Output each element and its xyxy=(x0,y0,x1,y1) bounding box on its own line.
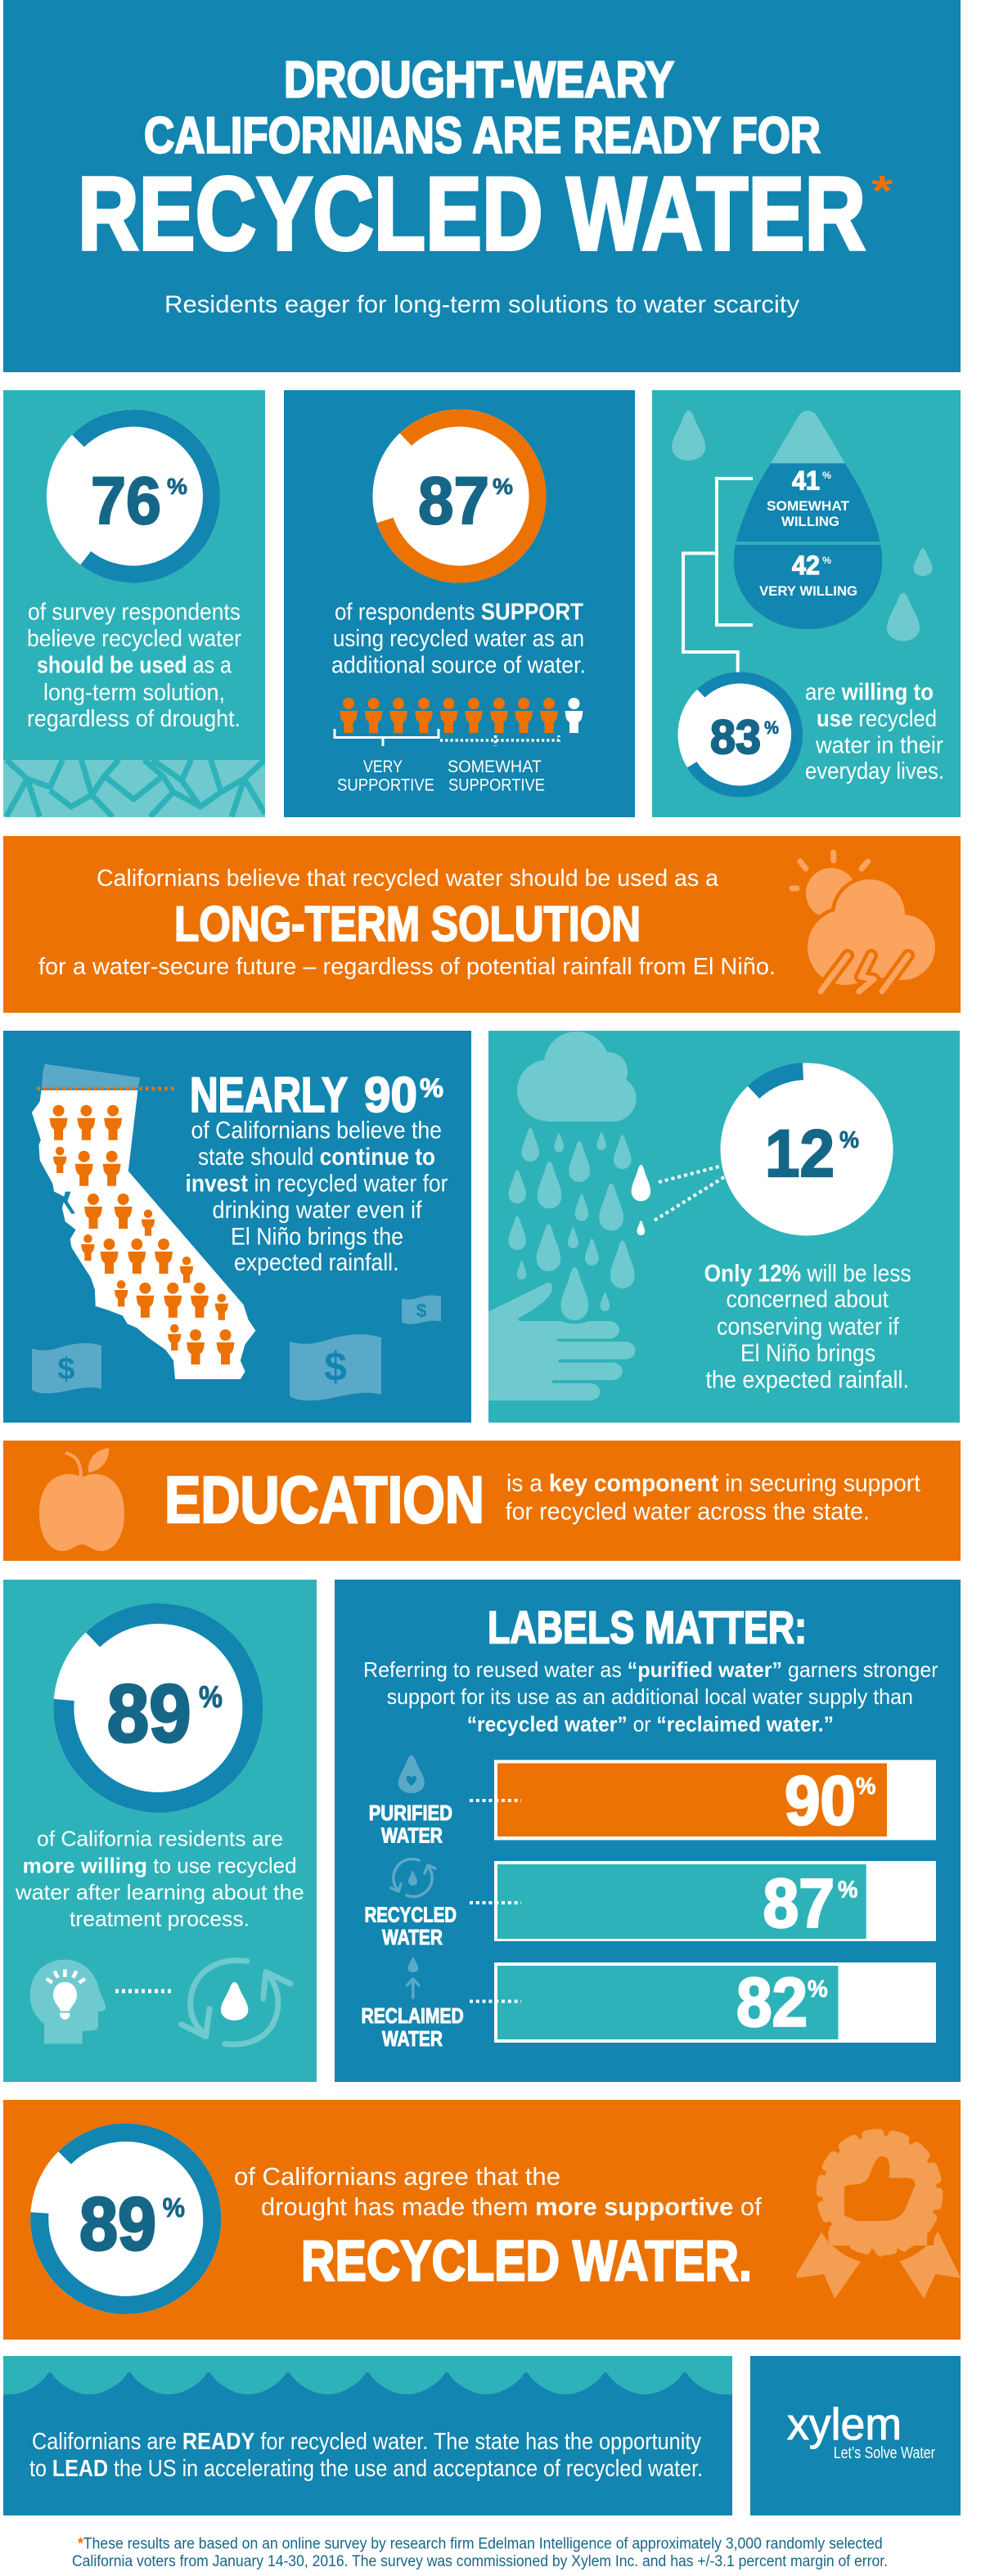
text: only 12 percent: El Niño brings xyxy=(740,1340,875,1367)
text: continue to invest: El Niño brings the xyxy=(231,1224,403,1251)
subtitle: Residents eager for long-term solutions to water scarcity xyxy=(164,291,799,318)
icon: dollar bills: $ xyxy=(324,1344,347,1390)
label: 42 percent very willing: % xyxy=(822,555,831,566)
text: purified water garners support: Referring to reused water as “purified water” garners stronger xyxy=(363,1657,938,1682)
icon: small drops xyxy=(672,411,933,641)
pattern: cracked earth xyxy=(3,760,265,817)
map: california xyxy=(32,1064,255,1379)
text: more willing xyxy=(15,1827,304,1931)
connector: dots xyxy=(115,1989,174,1993)
connector: bracket lines xyxy=(683,479,753,672)
icon: dollar bills xyxy=(32,1296,441,1400)
icon: recycle water xyxy=(182,1960,290,2044)
labels: supportive categories: SOMEWHAT xyxy=(448,758,542,776)
text: ready and lead xyxy=(29,2429,703,2482)
heading: nearly 90 percent: 90 xyxy=(364,1068,417,1122)
panel: 12 percent xyxy=(488,1031,960,1423)
panel: title banner xyxy=(3,0,961,372)
donut: 76 percent: % xyxy=(167,474,187,499)
donut: 87 percent: 87 xyxy=(418,464,489,538)
label: purified water xyxy=(369,1801,452,1848)
text: respondents support: using recycled water as an xyxy=(333,626,584,652)
text: survey respondents: regardless of drought. xyxy=(27,706,241,732)
label: 41 percent somewhat willing: 41 xyxy=(792,466,820,496)
text: drought more supportive xyxy=(234,2162,762,2221)
text: key component xyxy=(506,1470,921,1526)
bar: purified water 90 percent: 90 xyxy=(785,1762,856,1839)
bracket: somewhat supportive xyxy=(440,735,559,746)
label: recycled water: RECYCLED xyxy=(365,1902,457,1926)
panel: xylem logo: Let’s Solve Water xyxy=(834,2444,935,2462)
donut: 89 percent supportive xyxy=(30,2124,221,2314)
text: continue to invest: invest in recycled water for xyxy=(185,1171,448,1198)
bracket: very supportive xyxy=(335,729,439,746)
text: only 12 percent: concerned about xyxy=(727,1286,889,1313)
labels: supportive categories: VERY xyxy=(363,758,403,776)
donut: 76 percent xyxy=(47,409,220,582)
label: reclaimed water: RECLAIMED xyxy=(362,2003,464,2028)
text: survey respondents: of survey respondents xyxy=(28,599,241,625)
donut: 76 percent: 76 xyxy=(91,464,161,538)
donut: 83 percent xyxy=(677,672,802,797)
bar: reclaimed water 82 percent: % xyxy=(808,1976,828,2003)
text: continue to invest xyxy=(185,1117,448,1276)
donut: 89 percent supportive: 89 xyxy=(79,2183,156,2266)
icon: cloud, rain and hand xyxy=(488,1032,637,1400)
heading: drought-weary: DROUGHT-WEARY xyxy=(284,52,674,108)
pictogram: ten people xyxy=(340,698,583,733)
panel: long-term solution banner xyxy=(3,836,961,1013)
panel: nearly 90 percent xyxy=(3,1031,471,1423)
label: 41 percent somewhat willing: % xyxy=(822,470,831,481)
label: 42 percent very willing xyxy=(759,551,857,599)
text: more willing: of California residents are xyxy=(37,1827,283,1851)
label: recycled water: WATER xyxy=(382,1925,443,1949)
panel: call to action xyxy=(3,2356,732,2515)
text: key component: is a key component in securing support xyxy=(506,1470,921,1497)
label: 41 percent somewhat willing xyxy=(767,466,850,529)
heading: labels matter: LABELS MATTER: xyxy=(488,1602,807,1653)
bar: recycled water 87 percent xyxy=(494,1861,936,1942)
text: continue to invest: state should continue to xyxy=(198,1144,435,1171)
donut: 83 percent: 83 xyxy=(710,711,761,764)
icon: dollar bills: $ xyxy=(57,1352,75,1387)
asterisk: * xyxy=(871,168,893,215)
text: respondents support: additional source of water. xyxy=(331,653,586,679)
text: survey respondents xyxy=(27,599,241,732)
wave xyxy=(3,2372,732,2515)
label: 42 percent very willing: VERY WILLING xyxy=(759,583,857,599)
panel: 87 percent xyxy=(284,390,635,817)
text: survey respondents: believe recycled water xyxy=(27,626,241,652)
heading: californians are ready for: CALIFORNIANS ARE READY FOR xyxy=(144,108,821,164)
icon: dollar bills: $ xyxy=(416,1300,427,1321)
icon: recycle drop xyxy=(391,1859,435,1896)
text: more willing: treatment process. xyxy=(70,1907,250,1931)
text: more willing: more willing to use recycled xyxy=(23,1853,297,1877)
label: purified water: PURIFIED xyxy=(369,1801,452,1825)
text: survey respondents: should be used as a xyxy=(37,653,232,679)
text: ready and lead: to LEAD the US in accelerating the use and acceptance of recycled water. xyxy=(29,2456,703,2482)
icon: head with lightbulb xyxy=(30,1960,106,2043)
label: purified water: WATER xyxy=(381,1823,443,1848)
label: recycled water xyxy=(365,1902,457,1949)
panel: xylem logo xyxy=(750,2356,961,2515)
dotted line: 90 percent level xyxy=(37,1086,177,1090)
donut: 87 percent: % xyxy=(493,474,513,499)
text: water-secure future: for a water-secure future – regardless of potential rainfall from El Niño. xyxy=(38,954,776,980)
panel: xylem logo: xylem xyxy=(787,2398,902,2449)
label: reclaimed water xyxy=(362,2003,464,2051)
panel: more supportive banner xyxy=(3,2100,961,2340)
donut: 89 percent: % xyxy=(199,1680,223,1714)
footnote: California voters from January 14-30, 2016. The survey was commissioned by Xylem Inc. and has +/-3.1 percent margin of error. xyxy=(72,2553,888,2570)
panel: education banner xyxy=(3,1441,961,1561)
heading: recycled water: RECYCLED WATER. xyxy=(301,2229,752,2293)
heading: nearly 90 percent: % xyxy=(420,1073,443,1103)
text: ready and lead: Californians are READY for recycled water. The state has the opportunity xyxy=(32,2429,701,2455)
text: respondents support xyxy=(331,599,586,679)
donut: 89 percent: 89 xyxy=(107,1668,191,1760)
footnote: *These results are based on an online survey by research firm Edelman Intelligence of approximately 3,000 randomly selected xyxy=(78,2536,883,2553)
label: 41 percent somewhat willing: WILLING xyxy=(781,514,839,529)
bar: recycled water 87 percent: % xyxy=(838,1877,858,1904)
text: willing to use xyxy=(805,680,944,784)
heading: long-term solution: LONG-TERM SOLUTION xyxy=(174,897,641,951)
icon: sun cloud and rain xyxy=(792,852,935,991)
icon: drop and up arrow xyxy=(407,1958,419,1998)
donut: 12 percent xyxy=(720,1063,893,1235)
labels: supportive categories xyxy=(337,758,545,795)
bar: recycled water 87 percent: 87 xyxy=(763,1865,835,1942)
bar: purified water 90 percent: % xyxy=(856,1774,876,1800)
panel: 83 percent willing xyxy=(652,390,961,817)
donut: 12 percent: 12 xyxy=(765,1117,835,1191)
text: only 12 percent xyxy=(704,1261,911,1394)
donut: 89 percent supportive: % xyxy=(163,2192,185,2223)
text: continue to invest: expected rainfall. xyxy=(234,1249,399,1276)
text: survey respondents: long-term solution, xyxy=(43,680,225,706)
bar: reclaimed water 82 percent: 82 xyxy=(736,1964,808,2041)
text: drought more supportive: of Californians agree that the xyxy=(234,2162,560,2191)
pictogram: people on map xyxy=(50,1105,234,1364)
donut: 87 percent xyxy=(373,409,547,582)
labels: supportive categories: SUPPORTIVE xyxy=(448,775,545,795)
labels: supportive categories: SUPPORTIVE xyxy=(337,775,434,795)
icon: drop with heart xyxy=(398,1756,425,1793)
panel: 76 percent xyxy=(3,390,265,817)
chart: water drop split xyxy=(733,411,882,630)
icon: apple xyxy=(39,1448,124,1551)
text: more willing: water after learning about the xyxy=(15,1880,304,1904)
label: 42 percent very willing: 42 xyxy=(792,551,820,580)
text: only 12 percent: the expected rainfall. xyxy=(705,1367,909,1394)
connectors: dotted lines xyxy=(470,1801,521,2001)
heading: nearly 90 percent: NEARLY xyxy=(190,1068,348,1122)
label: reclaimed water: WATER xyxy=(382,2026,443,2051)
text: purified water garners support: “recycled water” or “reclaimed water.” xyxy=(467,1712,834,1737)
text: only 12 percent: conserving water if xyxy=(717,1314,899,1341)
text: willing to use: water in their xyxy=(815,733,943,759)
text: believe recycled water: Californians believe that recycled water should be used as a xyxy=(97,865,719,892)
text: only 12 percent: Only 12% will be less xyxy=(704,1261,911,1288)
panel: 89 percent more willing xyxy=(3,1580,317,2082)
text: willing to use: use recycled xyxy=(817,706,937,732)
icon: white drops xyxy=(632,1165,650,1235)
label: 41 percent somewhat willing: SOMEWHAT xyxy=(767,498,850,514)
donut: 12 percent: % xyxy=(839,1127,859,1153)
icon: thumbs-up award ribbon xyxy=(797,2127,961,2299)
bar: purified water 90 percent xyxy=(494,1760,936,1840)
text: purified water garners support xyxy=(363,1657,938,1737)
heading: education: EDUCATION xyxy=(164,1463,484,1537)
bar: reclaimed water 82 percent xyxy=(494,1962,936,2043)
text: drought more supportive: drought has made them more supportive of xyxy=(261,2192,762,2221)
text: willing to use: are willing to xyxy=(805,680,934,706)
text: purified water garners support: support for its use as an additional local water supply than xyxy=(387,1684,913,1709)
donut: 89 percent xyxy=(53,1603,263,1813)
footnote xyxy=(72,2536,888,2570)
text: continue to invest: of Californians believe the xyxy=(191,1117,442,1144)
panel: labels matter xyxy=(335,1580,961,2082)
text: willing to use: everyday lives. xyxy=(805,758,944,784)
connector: dotted lines xyxy=(655,1166,724,1221)
text: respondents support: of respondents SUPPORT xyxy=(335,599,583,625)
donut: 83 percent: % xyxy=(764,717,779,738)
text: continue to invest: drinking water even if xyxy=(213,1197,422,1224)
text: key component: for recycled water across the state. xyxy=(506,1499,870,1526)
